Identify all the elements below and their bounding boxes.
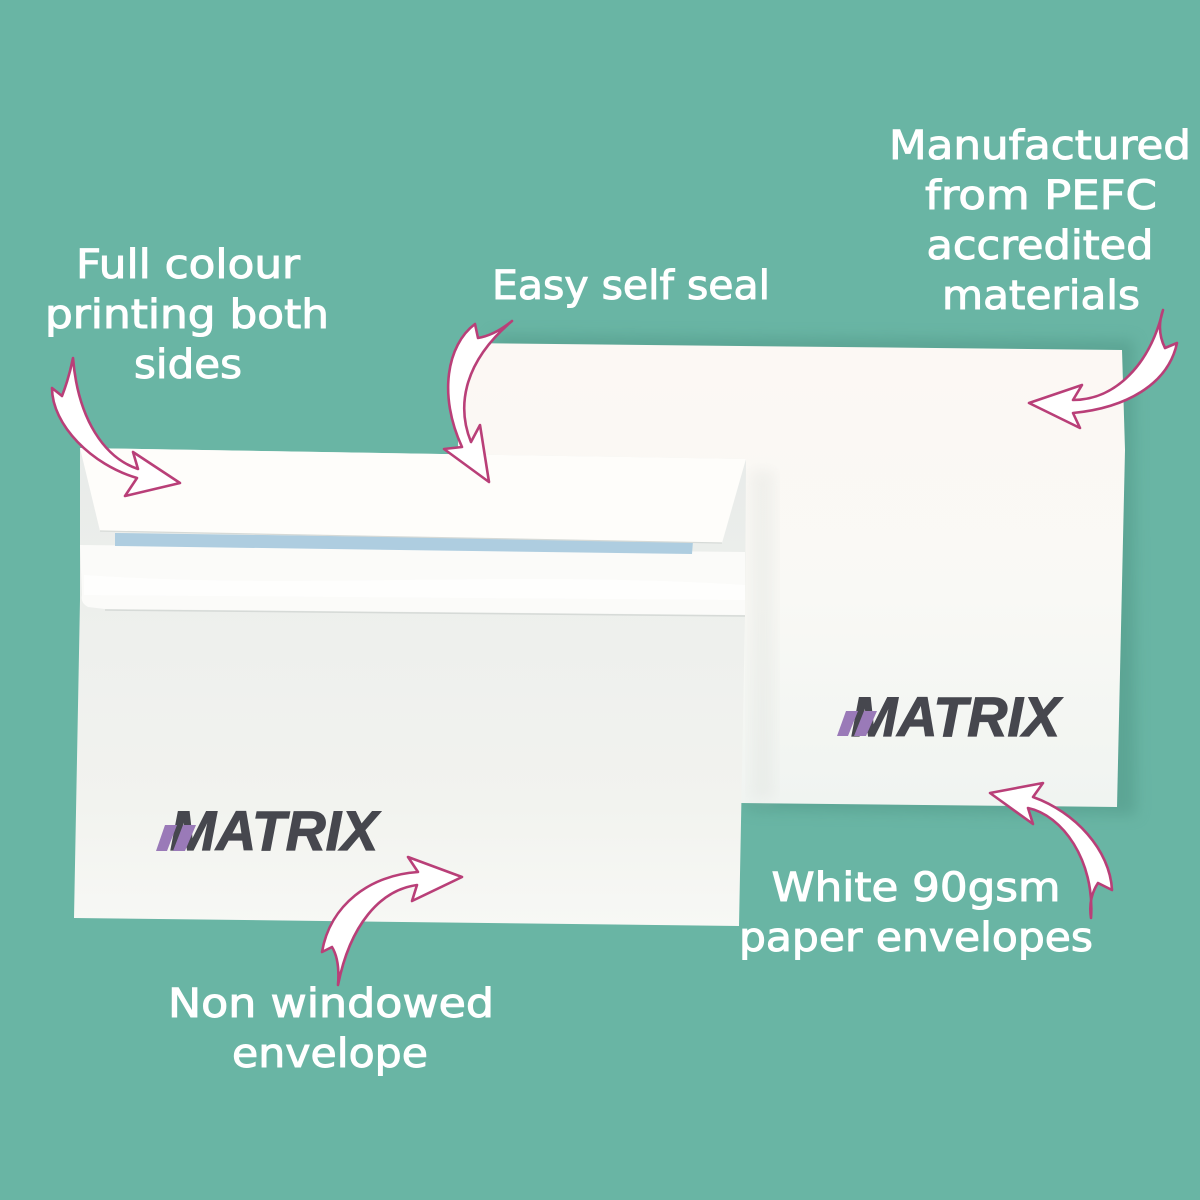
top flap <box>80 448 746 543</box>
label: manufactured: accredited <box>926 221 1154 269</box>
logo: large envelope: MATRIX <box>851 685 1064 748</box>
label: full colour: sides <box>134 340 242 388</box>
adhesive strip <box>115 533 693 554</box>
label: non windowed: envelope <box>232 1029 428 1077</box>
label: full colour <box>45 240 329 388</box>
label: non windowed: Non windowed <box>168 979 494 1027</box>
arrow: full colour <box>52 358 180 496</box>
label: manufactured: Manufactured <box>889 121 1191 169</box>
label: full colour: Full colour <box>76 240 300 288</box>
arrow: manufactured <box>1029 310 1177 428</box>
label: manufactured: from PEFC <box>925 171 1157 219</box>
arrow: white 90gsm <box>990 783 1112 918</box>
label: manufactured: materials <box>942 271 1140 319</box>
label: manufactured <box>889 121 1191 319</box>
label: white 90gsm <box>739 863 1093 961</box>
label: non windowed <box>168 979 494 1077</box>
small envelope <box>74 448 746 926</box>
logo: small envelope: MATRIX <box>170 799 382 862</box>
arrow: non windowed <box>322 857 462 985</box>
label: easy self seal: Easy self seal <box>492 261 770 309</box>
large envelope <box>458 335 1136 815</box>
lower flap <box>80 545 745 615</box>
label: white 90gsm: White 90gsm <box>772 863 1060 911</box>
arrow: easy self seal <box>444 321 512 482</box>
label: white 90gsm: paper envelopes <box>739 913 1093 961</box>
label: full colour: printing both <box>45 290 329 338</box>
